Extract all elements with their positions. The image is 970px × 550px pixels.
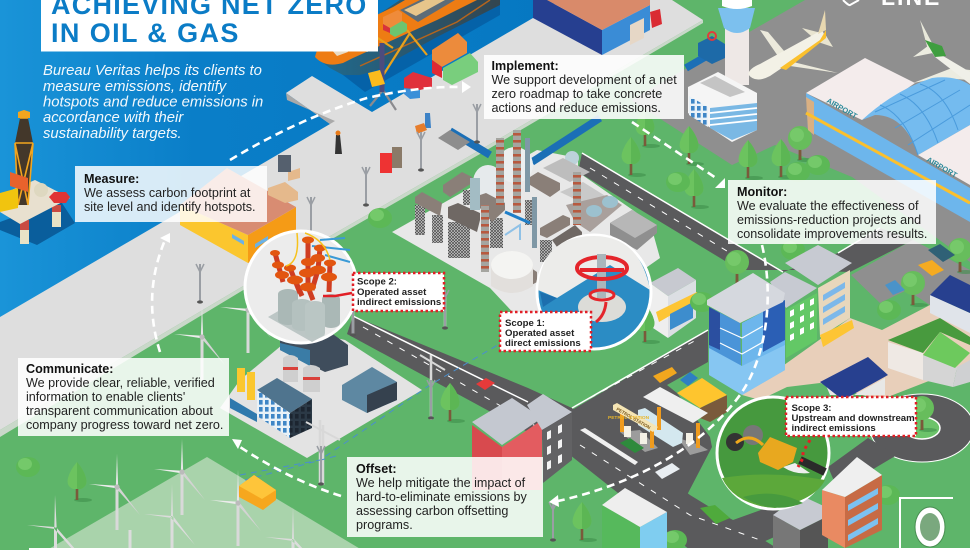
communicate text: company progress toward net zero. xyxy=(26,418,223,432)
light ground xyxy=(538,236,650,298)
parked blue car xyxy=(885,280,905,295)
scope 1 text: Operated asset xyxy=(505,328,575,339)
right building front xyxy=(367,382,397,413)
tail wing xyxy=(913,43,938,57)
rig derrick frame xyxy=(15,118,33,205)
intro text: hotspots and reduce emissions in xyxy=(43,94,263,110)
gray apartment block xyxy=(773,495,828,550)
side xyxy=(800,516,828,550)
roof xyxy=(180,168,296,235)
green building face xyxy=(786,293,817,358)
communicate text: We provide clear, reliable, verified xyxy=(26,376,215,390)
beige roof xyxy=(785,245,852,285)
oil rig platform xyxy=(0,110,75,245)
red right face xyxy=(502,420,542,490)
vehicles xyxy=(476,244,955,524)
roof xyxy=(822,457,882,497)
dashed arrow: communicate to measure xyxy=(152,233,170,352)
cooling cylinder two xyxy=(303,365,320,392)
boxes and forklifts xyxy=(268,147,402,203)
road: upper xyxy=(578,153,913,272)
tower cab xyxy=(718,8,755,33)
insulator columns xyxy=(278,289,298,325)
red bushing bodies xyxy=(275,240,330,300)
wing xyxy=(913,68,970,83)
detail circle: scope 3 fuel nozzle xyxy=(717,397,829,509)
detail circle: scope 2 transformer xyxy=(245,231,357,343)
office body xyxy=(688,72,757,142)
bottom strip xyxy=(29,548,970,550)
rig derrick xyxy=(15,118,33,205)
scope 3 text: Upstream and downstream xyxy=(792,413,915,424)
red dots pointer xyxy=(798,440,810,467)
forklift frame xyxy=(392,147,402,168)
ship red container xyxy=(383,24,390,33)
tower shaft xyxy=(725,25,749,85)
panel: implement xyxy=(484,55,684,119)
main building right face xyxy=(290,399,312,438)
nozzle hose end xyxy=(800,460,825,472)
tail colour xyxy=(925,40,946,57)
gray annex face xyxy=(542,413,572,483)
pallet boxes xyxy=(268,168,300,203)
chimneys xyxy=(481,130,581,272)
red left face xyxy=(472,425,502,490)
wall left xyxy=(180,205,248,263)
awning xyxy=(820,320,854,347)
red box xyxy=(650,9,662,28)
control tower xyxy=(718,0,755,85)
logo box xyxy=(900,498,953,550)
parked yellow car xyxy=(918,260,944,276)
blue right navy panel xyxy=(763,300,785,352)
slim blue stacks xyxy=(525,138,537,248)
quay lamps xyxy=(196,104,481,304)
trees and bushes xyxy=(16,108,970,550)
gray annex windows xyxy=(547,424,562,470)
dockside containers xyxy=(404,33,478,99)
scope 2 text: indirect emissions xyxy=(357,297,441,308)
rig deck xyxy=(0,180,70,224)
process box D xyxy=(480,193,505,222)
green house right wall xyxy=(953,360,970,387)
callout: scope 2 xyxy=(353,273,444,311)
nozzle body xyxy=(758,437,797,470)
small blue pipes xyxy=(505,212,530,223)
ship shadow xyxy=(343,0,500,92)
rig tank xyxy=(34,183,48,197)
bushing discs xyxy=(270,236,337,292)
green windows xyxy=(790,298,814,341)
dashed arrow: measure to implement xyxy=(230,81,471,160)
terminal roof right xyxy=(918,125,970,185)
lower red ring xyxy=(590,290,614,300)
factory pad: refinery xyxy=(392,150,660,320)
monitor text: emissions-reduction projects and xyxy=(737,213,921,227)
shield outline xyxy=(843,0,859,5)
blue warehouse xyxy=(533,0,662,55)
blue van at shop xyxy=(680,372,698,386)
panel: communicate xyxy=(18,358,229,436)
offset text: We help mitigate the impact of xyxy=(356,476,526,490)
quay workers xyxy=(335,113,431,154)
monitor text: We evaluate the effectiveness of xyxy=(737,199,919,213)
blue lower glass xyxy=(709,345,785,395)
stripe xyxy=(780,30,826,70)
logo mark xyxy=(920,513,940,541)
ship deck xyxy=(315,0,477,65)
blue left navy column xyxy=(709,307,720,350)
rig orange unit xyxy=(10,172,28,192)
blue container xyxy=(404,88,420,99)
insulator column four xyxy=(322,294,340,328)
deck with round tanks xyxy=(566,195,622,232)
beige building face xyxy=(818,270,850,337)
scope 1 text: Scope 1: xyxy=(505,318,545,329)
wheel hub top xyxy=(597,254,606,268)
process box B xyxy=(443,172,472,197)
parking lot xyxy=(851,240,970,305)
process box F xyxy=(540,215,570,238)
airport apron xyxy=(631,0,970,262)
implement text: Implement: xyxy=(492,59,559,73)
canopy legs xyxy=(620,407,700,448)
insulator column three xyxy=(305,301,325,338)
offset text: programs. xyxy=(356,518,413,532)
gray disc xyxy=(743,425,763,445)
dark water xyxy=(540,292,557,307)
implement text: actions and reduce emissions. xyxy=(492,101,661,115)
green house dark roof xyxy=(888,318,970,353)
monitor text: Monitor: xyxy=(737,185,787,199)
panel: offset xyxy=(347,457,543,537)
white car xyxy=(655,463,680,479)
tower top xyxy=(722,0,752,9)
logo seal xyxy=(915,507,945,547)
station sign xyxy=(613,403,658,432)
back building xyxy=(280,332,348,372)
blue house wall xyxy=(825,378,885,400)
fuselage xyxy=(928,47,970,84)
concrete quay area xyxy=(0,0,703,437)
forklift left xyxy=(278,155,291,172)
power plant pad xyxy=(220,330,422,458)
red building xyxy=(472,394,572,490)
airport terminal xyxy=(806,58,970,222)
roundabout island xyxy=(904,417,940,439)
blue roof xyxy=(707,273,785,323)
storage tanks rear xyxy=(473,165,503,199)
blue house roof xyxy=(820,357,888,400)
shop roof xyxy=(677,378,727,408)
deck hatches xyxy=(330,35,378,56)
communicate text: Communicate: xyxy=(26,362,113,376)
process box A xyxy=(415,192,442,216)
intro text: sustainability targets. xyxy=(43,126,182,142)
beige windows xyxy=(823,282,845,325)
helipad xyxy=(49,192,70,203)
blue pipeline xyxy=(450,53,712,162)
scope 2 text: Scope 2: xyxy=(357,276,397,288)
intro text: Bureau Veritas helps its clients to xyxy=(43,63,262,79)
intro text: measure emissions, identify xyxy=(43,79,228,95)
small red containers xyxy=(404,72,432,90)
measure text: We assess carbon footprint at xyxy=(84,186,251,200)
offset text: hard-to-eliminate emissions by xyxy=(356,490,527,504)
red wheel xyxy=(577,257,627,279)
houses xyxy=(820,275,970,400)
terminal label left: AIRPORT xyxy=(825,96,859,121)
terminal label right: AIRPORT xyxy=(925,155,959,180)
lower hill xyxy=(743,494,803,508)
road: roundabout xyxy=(870,394,970,462)
round tanks xyxy=(586,205,602,217)
yellow tanks xyxy=(237,368,255,400)
pipeline valve box xyxy=(698,32,725,64)
street lamps xyxy=(317,290,557,542)
ship hull xyxy=(315,0,500,75)
face xyxy=(773,515,800,550)
canopy xyxy=(643,387,708,423)
right windows xyxy=(848,488,878,541)
wings xyxy=(760,30,838,73)
nozzle hose xyxy=(736,438,763,445)
green house wall right xyxy=(923,355,957,387)
right block xyxy=(610,210,657,250)
top right house wall xyxy=(930,295,970,333)
worker two xyxy=(425,113,431,128)
wall right xyxy=(248,207,296,263)
deck cargo xyxy=(400,0,455,22)
forklift red xyxy=(380,153,392,173)
process box C xyxy=(448,203,480,232)
detail circle: scope 1 valve xyxy=(537,235,651,349)
power plant xyxy=(230,332,397,438)
dashed arrow: implement to monitor xyxy=(632,122,725,188)
rig legs xyxy=(20,205,61,232)
panel: measure xyxy=(75,166,267,222)
rear decks xyxy=(543,158,590,182)
crossing bar xyxy=(580,428,638,465)
scope 2 text: Operated asset xyxy=(357,287,427,298)
airport office building xyxy=(688,72,757,142)
airplane green xyxy=(913,20,970,84)
worker one xyxy=(335,135,342,154)
red pointer xyxy=(323,293,352,296)
ground slab xyxy=(268,310,325,342)
rig machinery xyxy=(0,188,18,212)
logo frame xyxy=(900,498,953,550)
right face xyxy=(640,512,667,550)
back building windows xyxy=(280,343,310,366)
road: roundabout link xyxy=(828,438,897,490)
white tank top xyxy=(491,251,533,279)
roof xyxy=(547,0,650,30)
top right house roof xyxy=(930,275,970,313)
green house light roof xyxy=(923,332,970,368)
dashed arrow: offset to communicate xyxy=(232,439,341,496)
blue wires xyxy=(312,238,350,262)
left face xyxy=(602,505,640,550)
office window grid xyxy=(689,96,708,127)
yellow wires xyxy=(286,233,330,266)
green apartment block xyxy=(602,488,667,550)
road: middle xyxy=(347,316,780,550)
right face xyxy=(845,475,882,548)
door xyxy=(630,18,644,45)
airplane yellow xyxy=(748,10,838,80)
small water tank xyxy=(565,151,579,165)
blue left face xyxy=(709,307,742,393)
trigger guard xyxy=(783,463,810,473)
terminal yellow stripe xyxy=(806,113,970,203)
green car xyxy=(620,438,644,453)
gray annex roof xyxy=(527,394,572,430)
blue right face xyxy=(742,300,785,395)
islands xyxy=(620,430,708,455)
cooling cylinder one xyxy=(283,355,298,382)
rig top xyxy=(18,110,30,118)
green car xyxy=(700,505,730,524)
dashed arrow: monitor to offset xyxy=(549,245,768,507)
terminal left end xyxy=(806,97,814,135)
rig shadow xyxy=(0,200,75,245)
worker one hard hat xyxy=(336,130,340,136)
ship green container xyxy=(390,21,407,37)
scope 3 text: indirect emissions xyxy=(792,423,876,434)
left face xyxy=(822,490,845,548)
tail wings xyxy=(802,28,833,47)
pumps xyxy=(624,426,693,444)
red car xyxy=(476,378,495,390)
wheel spokes xyxy=(580,268,624,272)
wind turbines xyxy=(27,277,304,550)
sea xyxy=(0,0,560,330)
callout: scope 3 xyxy=(786,397,916,436)
main building roof xyxy=(257,378,312,413)
main building left face xyxy=(257,390,290,438)
glass arch xyxy=(862,77,970,155)
white band lines xyxy=(720,326,763,354)
wall right xyxy=(602,5,650,55)
cylinder bands xyxy=(283,367,320,380)
wall left xyxy=(533,0,602,55)
insulator column two xyxy=(292,299,312,331)
refinery xyxy=(415,130,657,293)
road: cross and gas station apron xyxy=(570,330,790,550)
terminal roof left xyxy=(806,58,915,120)
communicate text: information to enable clients' xyxy=(26,390,185,404)
flange xyxy=(578,292,626,322)
arch grid xyxy=(875,80,970,155)
red container xyxy=(432,60,442,78)
parked teal van xyxy=(928,244,955,262)
offset text: Offset: xyxy=(356,462,397,476)
red pointer xyxy=(596,302,606,322)
rig leg floats xyxy=(20,212,61,244)
roof xyxy=(602,488,667,527)
offset text: assessing carbon offsetting xyxy=(356,504,508,518)
crane xyxy=(368,30,427,110)
process box E xyxy=(530,172,560,197)
measure text: site level and identify hotspots. xyxy=(84,200,256,214)
orange apartment block xyxy=(822,457,882,548)
communicate text: transparent communication about xyxy=(26,404,213,418)
monitor text: consolidate improvements results. xyxy=(737,227,927,241)
hill xyxy=(722,474,825,508)
sign text: PETROL STATION xyxy=(616,407,651,430)
yellow car xyxy=(653,367,677,383)
roof xyxy=(773,495,828,530)
fuel port xyxy=(726,433,744,451)
title text: IN OIL & GAS xyxy=(51,18,240,48)
lattice scaffolds xyxy=(415,190,552,262)
green container xyxy=(443,53,478,85)
orange pallet xyxy=(415,123,427,134)
roads xyxy=(347,153,970,550)
orange container xyxy=(239,475,276,510)
top right logo text xyxy=(843,0,941,10)
terminal wall xyxy=(806,93,970,222)
office front bands xyxy=(710,103,757,140)
sign reflection text: PETROL STATION xyxy=(608,415,650,421)
green house wall left xyxy=(888,342,923,380)
light green wind farm field xyxy=(47,457,362,550)
wide blue stack xyxy=(470,178,480,210)
shop wall xyxy=(700,395,727,422)
deck two xyxy=(560,182,607,205)
white storage tank xyxy=(491,251,533,293)
windows xyxy=(232,234,268,248)
blue tower block xyxy=(707,245,854,395)
orange container xyxy=(432,33,467,67)
tail xyxy=(818,10,826,34)
scope 3 text: Scope 3: xyxy=(792,403,832,414)
power poles xyxy=(240,290,540,485)
red roof xyxy=(472,398,542,445)
implement text: zero roadmap to take concrete xyxy=(492,87,662,101)
right building xyxy=(342,367,397,413)
pipe base on quay xyxy=(438,130,470,150)
measure text: Measure: xyxy=(84,172,139,186)
valve stem xyxy=(597,255,606,298)
small shop near Scope 1 xyxy=(650,268,699,338)
process box H xyxy=(518,266,537,287)
intro text: accordance with their xyxy=(43,110,184,126)
hull stripe xyxy=(360,0,490,66)
beige town plaza xyxy=(742,305,970,400)
fuselage xyxy=(748,30,826,80)
office roof inset xyxy=(700,76,745,97)
process box G xyxy=(552,225,582,247)
tail xyxy=(920,20,932,50)
yellow warehouse xyxy=(180,168,296,263)
gas station xyxy=(608,378,727,479)
low left block xyxy=(230,398,257,422)
ship xyxy=(315,0,500,92)
bus xyxy=(638,408,683,447)
panel: monitor xyxy=(728,180,936,244)
callout: scope 1 xyxy=(500,312,591,351)
green roof xyxy=(770,272,817,308)
scope 1 text: direct emissions xyxy=(505,338,581,349)
title panel xyxy=(41,0,378,52)
implement text: We support development of a net xyxy=(492,73,677,87)
ship containers xyxy=(383,10,402,30)
